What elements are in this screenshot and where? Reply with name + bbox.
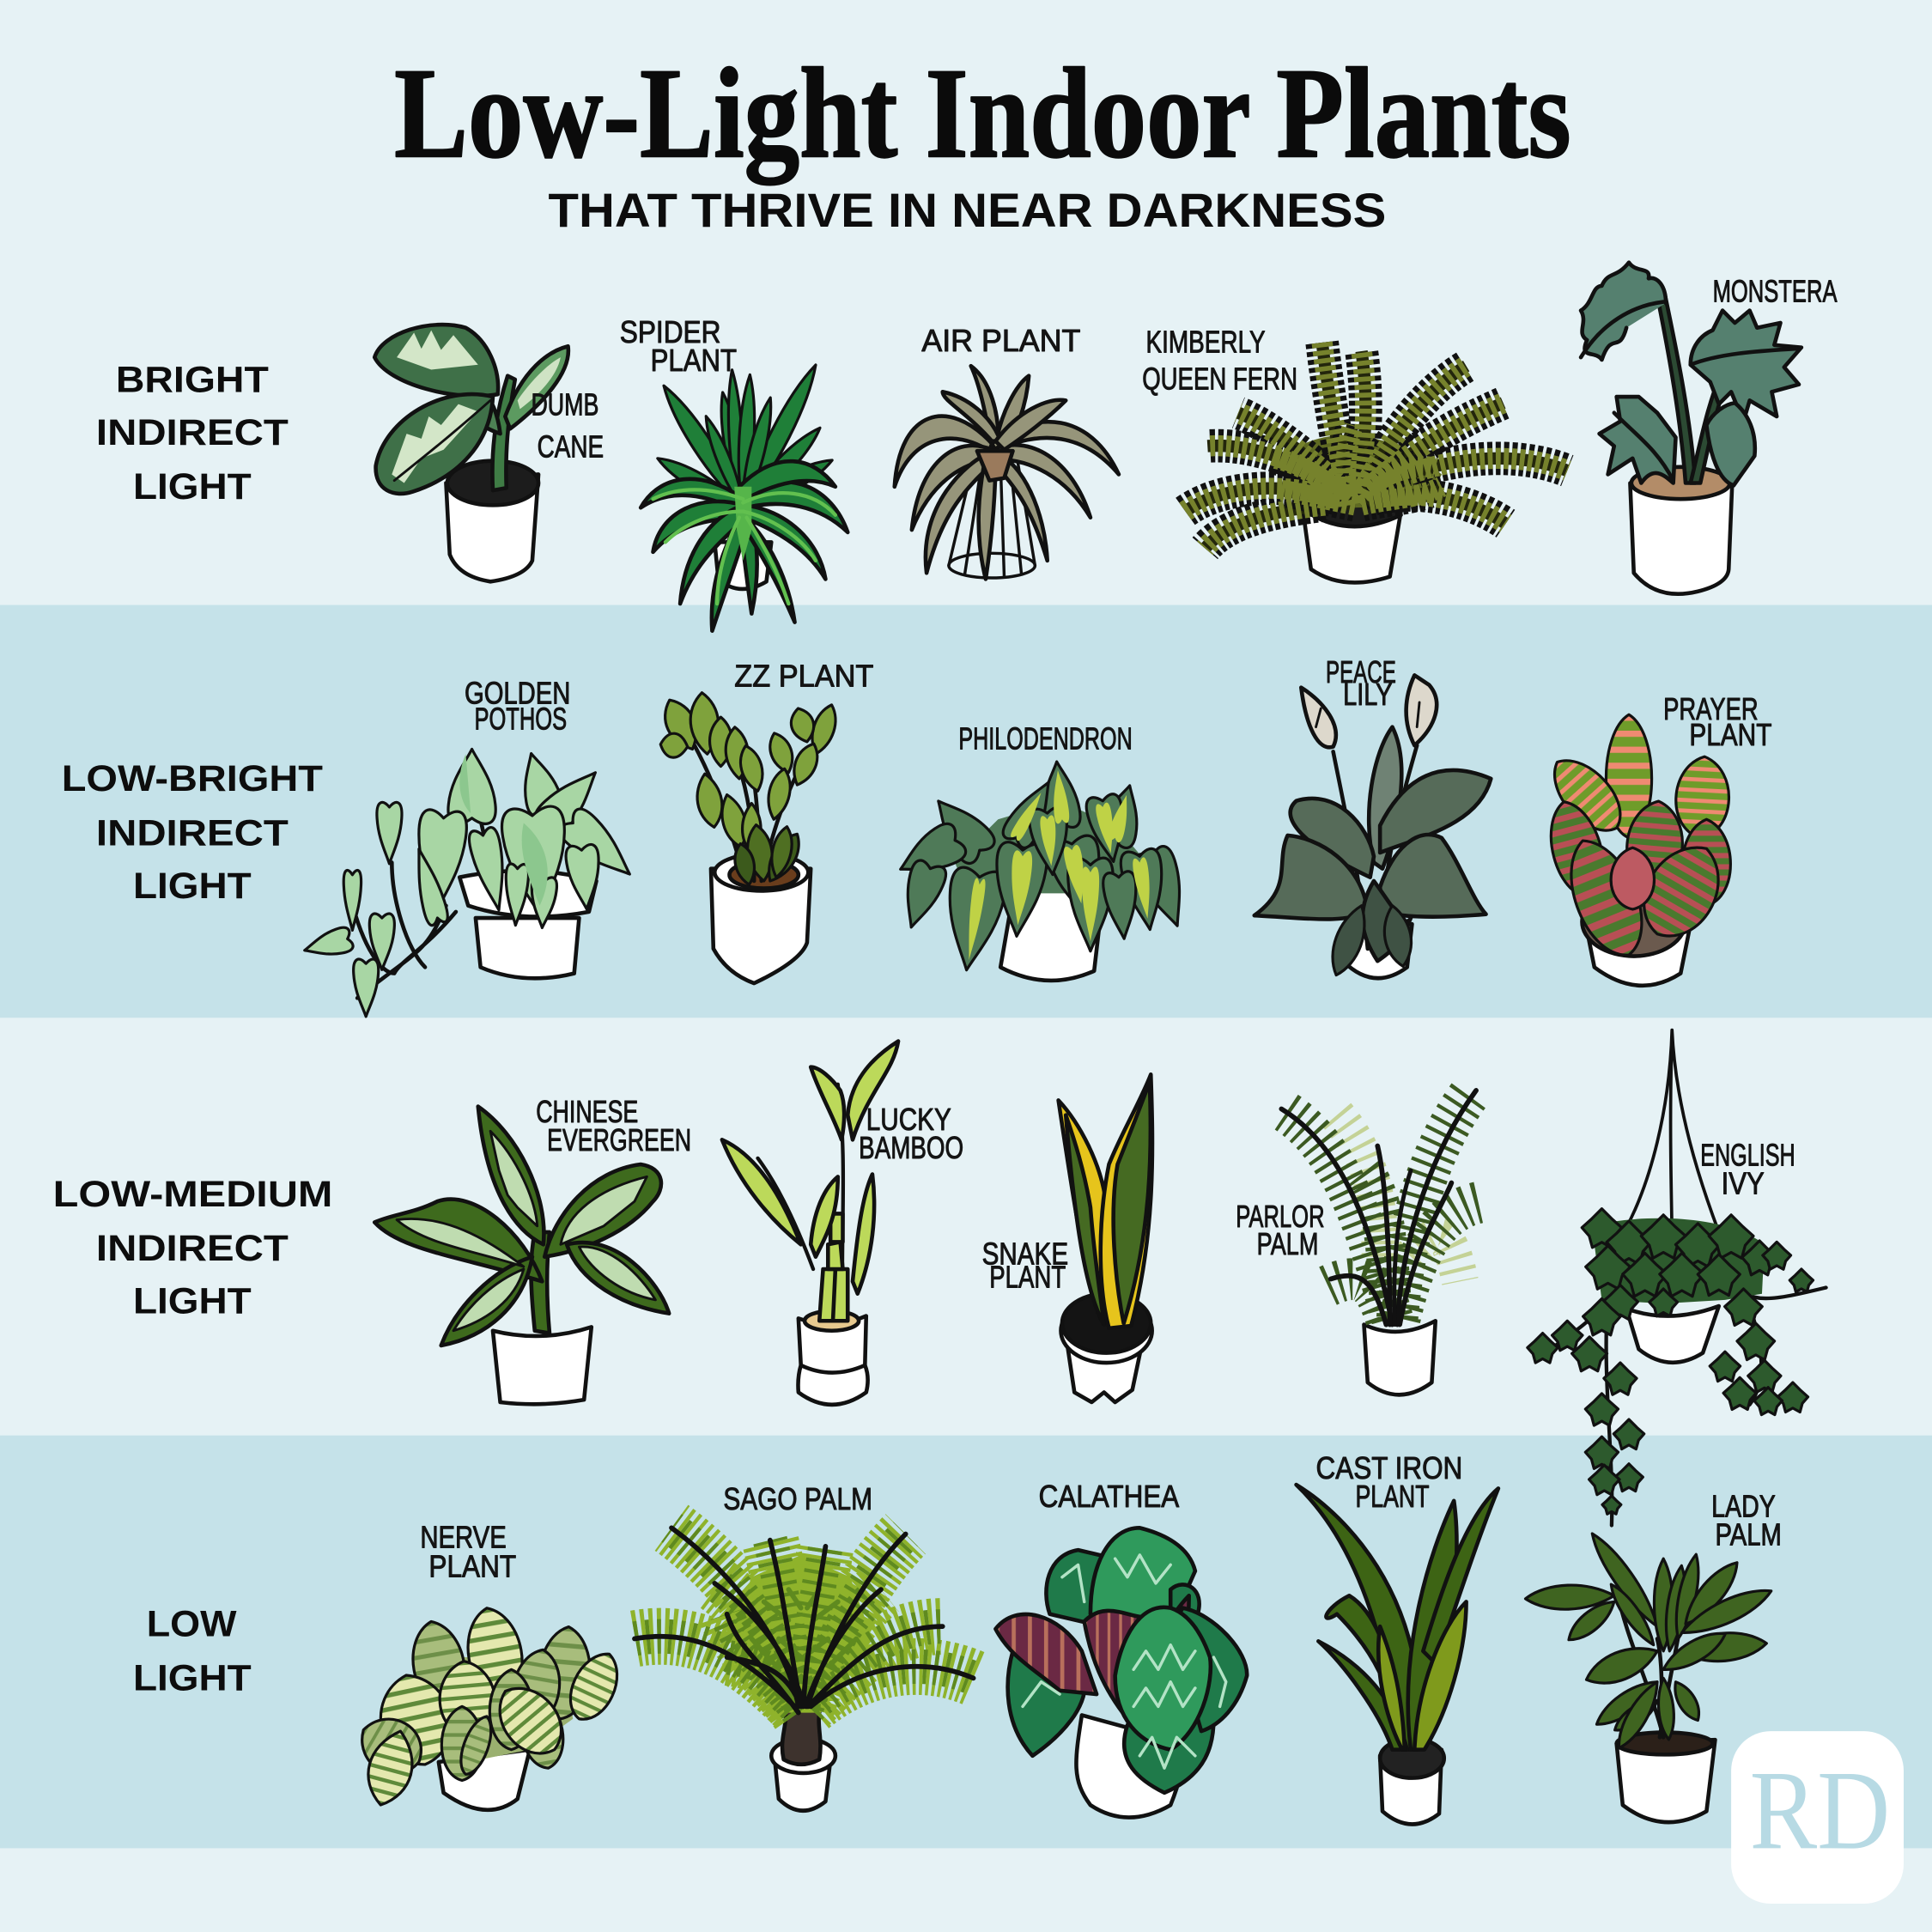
- plant: english ivy: ENGLISH: [1700, 1138, 1795, 1172]
- plant: parlor palm: PARLOR: [1236, 1200, 1325, 1234]
- subtitle: THAT THRIVE IN NEAR DARKNESS: [549, 183, 1386, 237]
- row label: low-medium indirect light: LOW-MEDIUM: [53, 1174, 332, 1215]
- plant: parlor palm: PALM: [1257, 1227, 1318, 1261]
- plant: snake plant: PLANT: [989, 1261, 1066, 1295]
- plant: monstera: [1581, 263, 1838, 594]
- plant: golden pothos: GOLDEN: [465, 676, 570, 710]
- plant: cast iron plant: [1297, 1451, 1498, 1824]
- plant: chinese evergreen: [374, 1095, 691, 1404]
- plant: chinese evergreen: CHINESE: [536, 1095, 638, 1129]
- row label: bright indirect light: [96, 359, 289, 507]
- plant: air plant: [895, 324, 1119, 579]
- plant: zz plant: ZZ PLANT: [734, 659, 873, 693]
- plant: sago palm: [635, 1482, 974, 1811]
- plant: nerve plant: NERVE: [420, 1520, 507, 1554]
- plant: peace lily: [1255, 655, 1491, 980]
- plant: kimberly queen fern: QUEEN FERN: [1142, 361, 1297, 396]
- plant: english ivy: [1528, 1030, 1826, 1525]
- row label: low light: LIGHT: [133, 1658, 252, 1699]
- row label: bright indirect light: INDIRECT: [96, 412, 289, 453]
- row label: low-bright indirect light: [62, 758, 323, 907]
- plant: dumb cane: DUMB: [531, 388, 598, 422]
- plant: nerve plant: [350, 1520, 628, 1810]
- plant: snake plant: [982, 1074, 1152, 1402]
- plant: philodendron: PHILODENDRON: [958, 721, 1133, 756]
- plant: zz plant: [657, 659, 873, 983]
- plant: monstera: MONSTERA: [1713, 275, 1838, 309]
- plant: spider plant: PLANT: [651, 343, 737, 378]
- plant: nerve plant: PLANT: [428, 1550, 516, 1584]
- plant: kimberly queen fern: KIMBERLY: [1146, 325, 1266, 359]
- plant: prayer plant: PRAYER: [1663, 692, 1759, 726]
- plant: prayer plant: PLANT: [1689, 718, 1772, 752]
- plant: chinese evergreen: EVERGREEN: [547, 1123, 691, 1157]
- row label: bright indirect light: LIGHT: [133, 466, 252, 507]
- plant: lucky bamboo: LUCKY: [866, 1103, 951, 1137]
- plant: calathea: CALATHEA: [1039, 1479, 1179, 1514]
- row label: low-bright indirect light: LIGHT: [133, 866, 252, 907]
- plant: sago palm: SAGO PALM: [723, 1482, 872, 1516]
- plant: spider plant: [620, 315, 848, 631]
- plant: dumb cane: CANE: [538, 429, 604, 464]
- plant: lady palm: LADY: [1711, 1489, 1776, 1523]
- plant: calathea: [995, 1479, 1247, 1818]
- plant: dumb cane: [374, 325, 604, 581]
- plant: snake plant: SNAKE: [982, 1236, 1068, 1271]
- plant: cast iron plant: CAST IRON: [1316, 1451, 1462, 1485]
- plant: english ivy: IVY: [1722, 1166, 1765, 1200]
- plant: lady palm: PALM: [1715, 1517, 1782, 1552]
- plant: golden pothos: [301, 676, 642, 1017]
- plant: kimberly queen fern: [1142, 325, 1567, 582]
- plant: lucky bamboo: [722, 1042, 963, 1405]
- plant: philodendron: [891, 721, 1196, 981]
- plant: parlor palm: [1236, 1091, 1485, 1394]
- plant: golden pothos: POTHOS: [474, 702, 567, 736]
- title: Low-Light Indoor Plants: [394, 41, 1571, 185]
- band: low row: [0, 1436, 1932, 1848]
- logo: RD: RD: [1750, 1747, 1890, 1873]
- row label: low light: [133, 1604, 252, 1699]
- plant: air plant: AIR PLANT: [921, 324, 1081, 358]
- row label: low light: LOW: [147, 1604, 237, 1645]
- plant: peace lily: LILY: [1343, 677, 1393, 712]
- plant: peace lily: PEACE: [1326, 655, 1396, 690]
- band: low-bright row: [0, 605, 1932, 1018]
- row label: low-medium indirect light: [53, 1174, 332, 1322]
- plant: cast iron plant: PLANT: [1355, 1479, 1430, 1514]
- row label: bright indirect light: BRIGHT: [116, 359, 269, 400]
- plant: lady palm: [1525, 1489, 1782, 1822]
- logo: RD: [1731, 1731, 1904, 1904]
- plant: lucky bamboo: BAMBOO: [859, 1131, 963, 1165]
- row label: low-medium indirect light: LIGHT: [133, 1281, 252, 1322]
- plant: spider plant: SPIDER: [620, 315, 720, 349]
- row label: low-bright indirect light: LOW-BRIGHT: [62, 758, 323, 799]
- row label: low-medium indirect light: INDIRECT: [96, 1228, 289, 1269]
- row label: low-bright indirect light: INDIRECT: [96, 812, 289, 854]
- plant: prayer plant: [1540, 692, 1772, 986]
